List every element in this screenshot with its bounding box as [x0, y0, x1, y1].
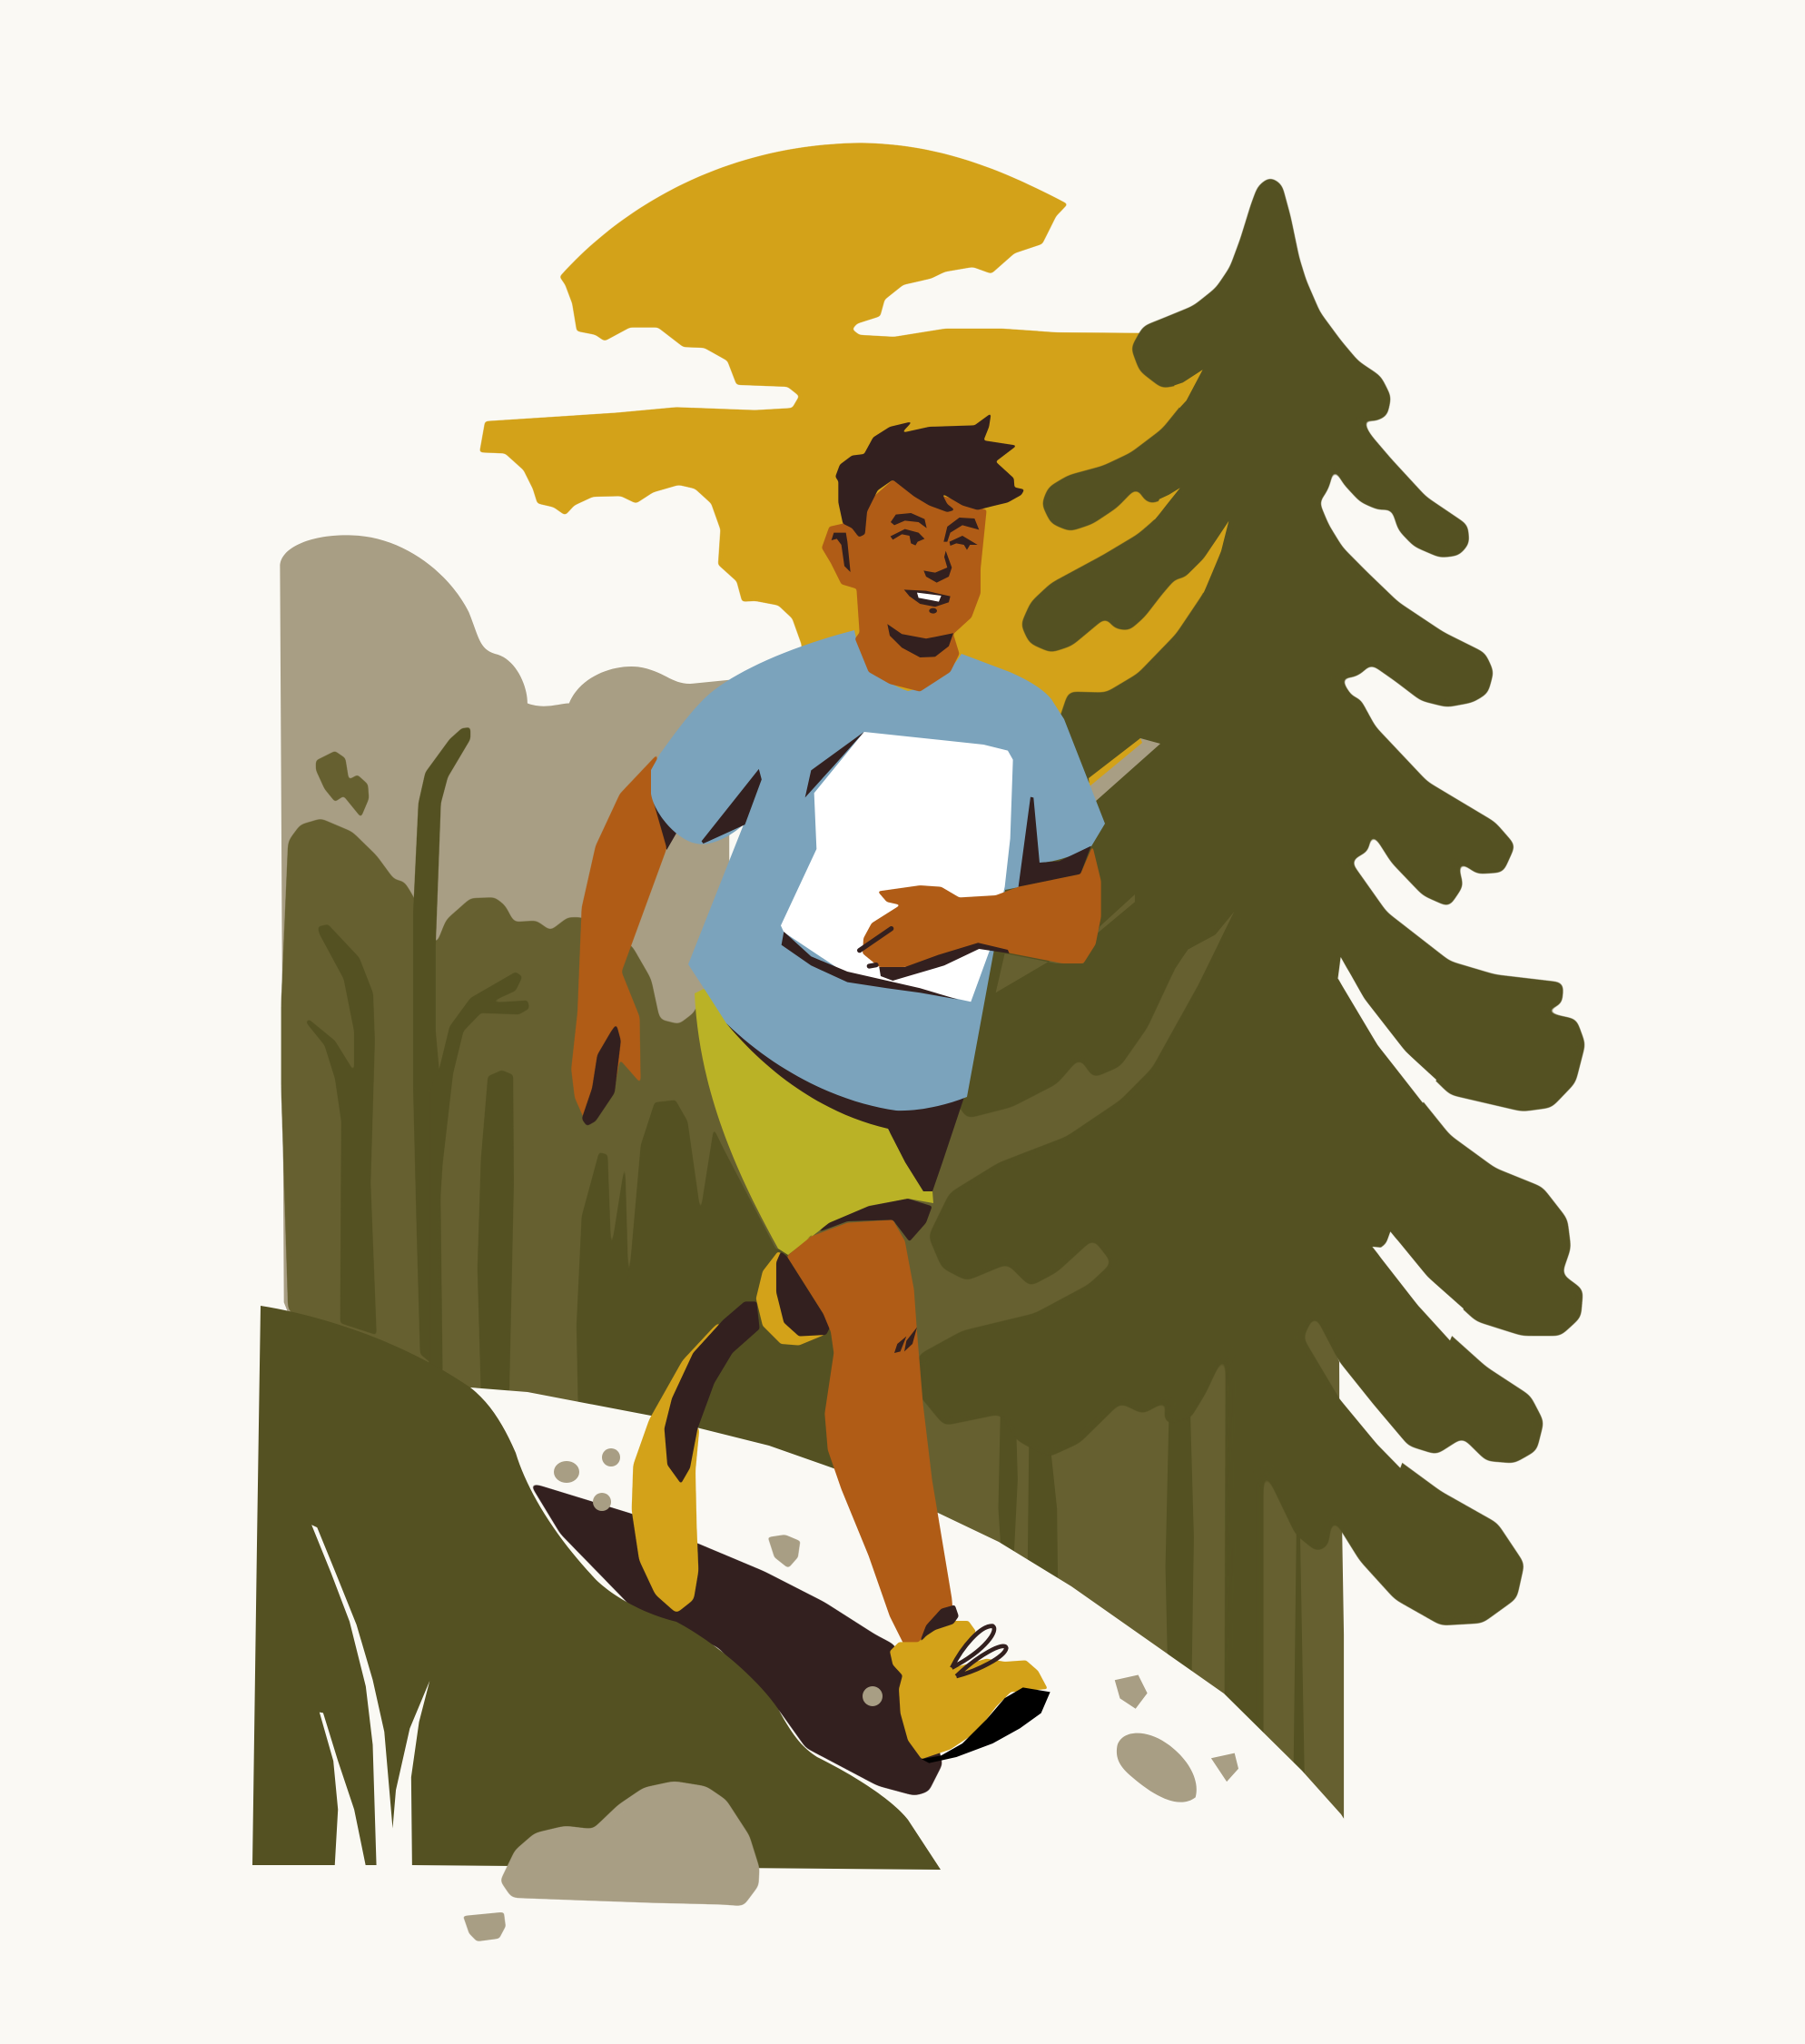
trunk 2	[1028, 1439, 1058, 1584]
sleeve shadow right	[1019, 797, 1091, 887]
finger lines	[860, 929, 892, 966]
shorts	[695, 989, 933, 1255]
sole	[922, 1687, 1050, 1763]
thigh and calf	[787, 1219, 953, 1644]
grey ridge strip behind sleeve	[1080, 738, 1160, 802]
stone right 2	[1117, 1733, 1197, 1802]
forked stem	[305, 924, 377, 1335]
mouth	[904, 589, 951, 607]
upper branches	[1021, 177, 1494, 754]
bib and right arm	[781, 732, 1101, 1002]
runner	[571, 413, 1105, 1763]
sock shadow	[776, 1251, 831, 1337]
neck shadow	[887, 624, 953, 657]
ankle shadow	[919, 1605, 959, 1644]
hand shadow	[879, 943, 1010, 981]
sun behind clouds	[479, 143, 1241, 785]
forest background left	[281, 818, 894, 1516]
left eye	[891, 529, 924, 546]
stone right 3	[1211, 1753, 1238, 1782]
bib paper	[781, 732, 1013, 1002]
forest plants left	[305, 727, 894, 1516]
stone on trail	[768, 1535, 800, 1568]
pebble 4	[863, 1686, 883, 1706]
stone right 1	[1115, 1675, 1148, 1709]
big rock	[500, 1781, 760, 1906]
arm skin	[571, 754, 666, 1121]
dark shadow on trail	[528, 1482, 942, 1796]
knee marks	[894, 1328, 917, 1353]
short blade	[320, 1713, 366, 1866]
t-shirt	[651, 630, 1105, 1111]
tall reed	[413, 727, 470, 1373]
straight stem	[478, 1070, 514, 1392]
trail	[245, 1387, 1349, 2044]
grass blades	[311, 1525, 429, 1866]
gap b	[1151, 488, 1180, 521]
forest background right	[894, 868, 1344, 1827]
tall blades	[311, 1525, 429, 1866]
nose	[923, 551, 952, 583]
light band under arm	[996, 894, 1135, 992]
trunk 1	[999, 1404, 1018, 1552]
right brow	[943, 518, 979, 542]
shoe upper	[890, 1621, 1048, 1759]
left hill	[252, 1306, 941, 1870]
lower branches	[918, 692, 1585, 1827]
gap c	[1183, 521, 1228, 597]
back leg	[632, 1251, 831, 1614]
face and neck	[822, 479, 987, 692]
gap a	[1174, 370, 1203, 408]
bib lower shadow	[782, 932, 958, 1000]
trunk 5	[1293, 1529, 1306, 1827]
pine tree	[918, 177, 1585, 1827]
hand shadow	[582, 1024, 621, 1126]
pebble 3	[593, 1493, 611, 1511]
dark undergrowth	[577, 1100, 894, 1516]
gap 1	[1338, 957, 1436, 1103]
pebble 2	[602, 1448, 620, 1466]
gap 2	[1372, 1231, 1464, 1340]
ear detail	[832, 533, 851, 572]
teeth	[917, 593, 942, 602]
leaf cluster	[316, 751, 369, 817]
head	[822, 413, 1024, 692]
small rock	[463, 1912, 506, 1941]
right arm	[863, 846, 1101, 967]
branching stem	[429, 972, 529, 1373]
grey mountain	[280, 535, 729, 1316]
white gaps between tree branches	[1338, 957, 1464, 1468]
back shoe shadow	[665, 1301, 760, 1484]
light band under lobe	[1175, 912, 1234, 992]
hair	[835, 413, 1024, 538]
shorts shadow under shirt	[726, 1023, 965, 1191]
trunk 3	[1166, 1410, 1194, 1769]
pebble 1	[554, 1461, 579, 1483]
sock	[756, 1251, 831, 1346]
shirt fold left	[702, 769, 762, 844]
sun gaps between upper branches	[1151, 370, 1228, 597]
back shoe	[632, 1317, 724, 1614]
front leg	[787, 1199, 953, 1644]
trunks lower right	[999, 1404, 1306, 1827]
bib fold shadow	[805, 732, 864, 797]
laces	[952, 1626, 1006, 1676]
sun sliver behind sleeve	[1089, 738, 1142, 786]
left brow	[891, 513, 927, 528]
shorts hem shadow	[788, 1199, 932, 1255]
right eye	[950, 536, 978, 550]
left arm	[571, 754, 677, 1126]
sleeve shadow	[648, 765, 677, 850]
gap 3	[1339, 1362, 1408, 1468]
chin dot	[929, 608, 937, 614]
front shoe	[890, 1605, 1050, 1763]
rocks and pebbles	[463, 1448, 1238, 1941]
